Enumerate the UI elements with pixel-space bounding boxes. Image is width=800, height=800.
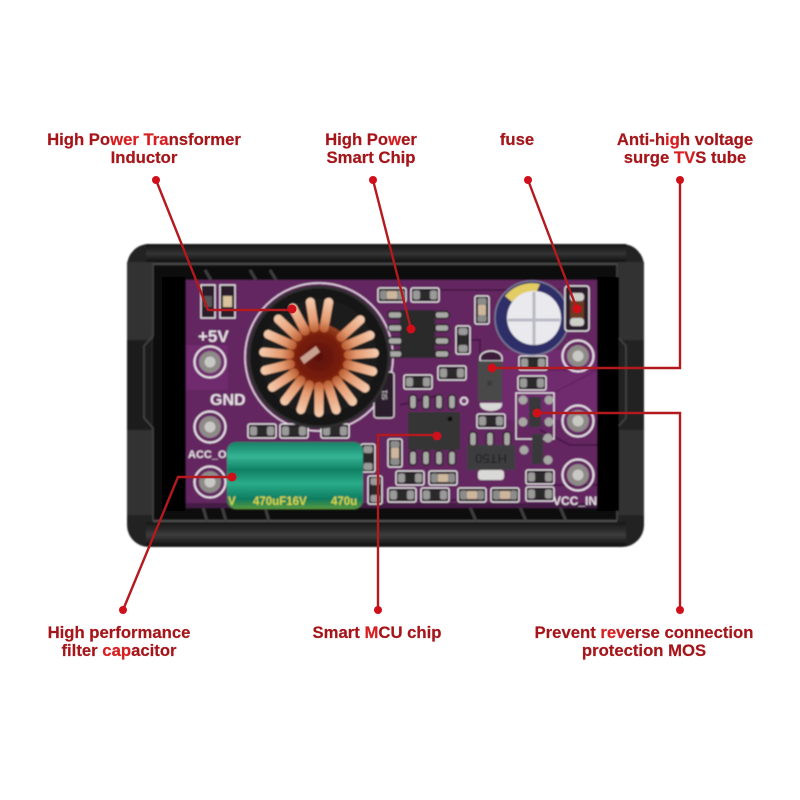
label: MOS: protection MOS [582, 641, 706, 660]
black plastic case [127, 244, 644, 547]
label: fuse: fuse [500, 130, 534, 149]
smart chip [388, 310, 449, 358]
smd resistors and capacitors [248, 288, 554, 504]
label: inductor: High Power Transformer [47, 130, 241, 149]
MOS transistors [516, 393, 554, 464]
callout: MOS line [532, 408, 684, 614]
green filter capacitor: V [228, 496, 236, 508]
silkscreen labels: +5V [198, 327, 229, 346]
silkscreen labels: VCC_IN [553, 494, 597, 508]
SMD test label 51: Sl1 [382, 390, 389, 400]
label: MOS: Prevent reverse connection [535, 623, 753, 642]
MCU chip [408, 395, 468, 465]
callout: MCU line [374, 432, 442, 614]
SMD test label 51 [374, 372, 394, 418]
HT50 regulator: HT50 [475, 451, 507, 466]
callout: inductor line [152, 176, 296, 314]
terminal pads [194, 340, 594, 498]
green filter capacitor: 470u [331, 496, 357, 508]
TVS tube: R [487, 381, 493, 388]
label: filter capacitor: filter capacitor [61, 641, 177, 660]
silkscreen labels: GND [210, 392, 246, 409]
label: TVS: Anti-high voltage [617, 130, 753, 149]
label: TVS: surge TVS tube [624, 148, 746, 167]
purple circuit board [186, 280, 597, 508]
label: smart chip: High Power [325, 130, 417, 149]
small electrolytic capacitor [495, 281, 569, 355]
label: filter capacitor: High performance [48, 623, 190, 642]
label: smart chip: Smart Chip [326, 148, 416, 167]
toroidal transformer inductor [249, 287, 389, 427]
silkscreen labels [188, 327, 597, 508]
fuse [565, 286, 589, 331]
HT50 regulator [467, 432, 515, 480]
callout: filter capacitor line [119, 472, 236, 614]
callout: smart chip line [369, 176, 416, 334]
label: inductor: Inductor [111, 148, 178, 167]
green filter capacitor [227, 442, 363, 509]
callout: TVS line [488, 176, 684, 372]
product photo: PCB module in black case [127, 244, 644, 547]
silkscreen labels: ACC_O [188, 449, 227, 461]
label: MCU: Smart MCU chip [313, 623, 441, 642]
green filter capacitor: 470uF16V [253, 496, 307, 508]
TVS tube [478, 351, 502, 411]
small parts near +5V [201, 285, 235, 318]
callout: fuse line [524, 176, 582, 314]
